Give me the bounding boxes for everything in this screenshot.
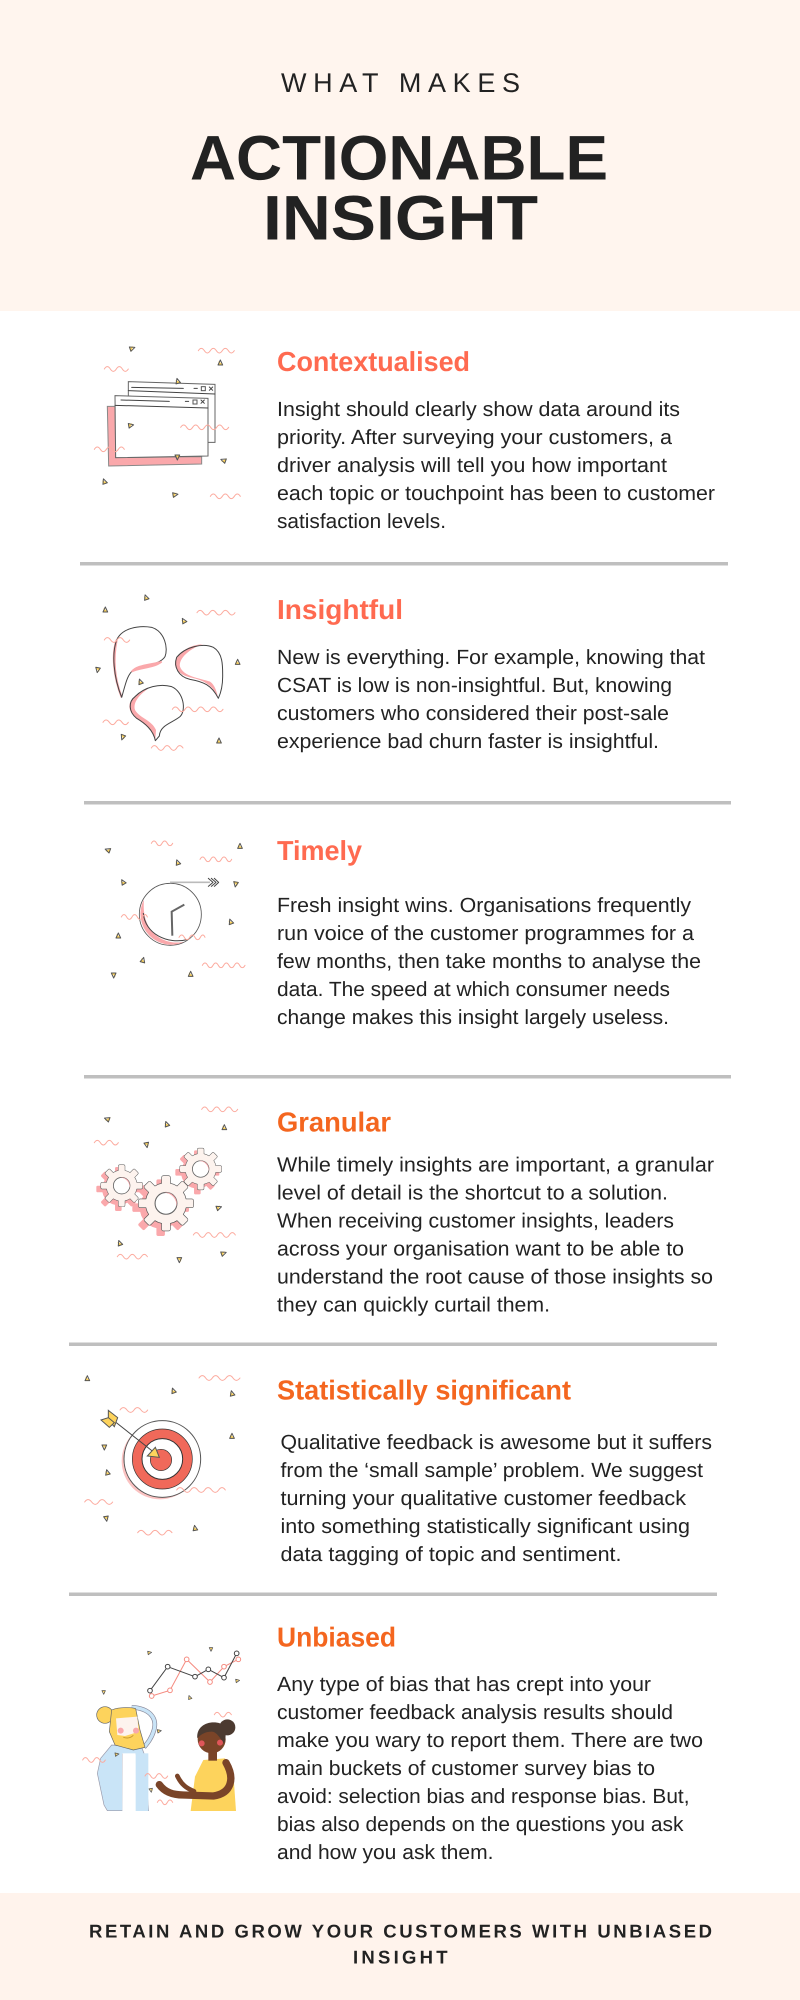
text block: timely bbox=[277, 894, 701, 1029]
text block: timely: run voice of the customer programmes for a bbox=[277, 922, 695, 945]
text block: unbiased: avoid: selection bias and response bias. But, bbox=[277, 1785, 690, 1808]
text block: granular: they can quickly curtail them. bbox=[277, 1294, 550, 1316]
heading: insightful: Insightful bbox=[277, 594, 403, 625]
text block: unbiased: bias also depends on the questions you ask bbox=[277, 1813, 684, 1836]
title bbox=[190, 124, 608, 254]
text block: unbiased bbox=[277, 1673, 703, 1864]
woman bbox=[159, 1719, 236, 1811]
text block: contextualised bbox=[277, 398, 715, 533]
footer call to action bbox=[89, 1920, 712, 1968]
text block: timely: few months, then take months to analyse the bbox=[277, 950, 701, 973]
panel: timely bbox=[104, 835, 701, 1029]
icon: two people discussing a chart bbox=[83, 1647, 241, 1811]
text block: contextualised: each topic or touchpoint has been to customer bbox=[277, 482, 715, 505]
text block: contextualised: priority. After surveying your customers, a bbox=[277, 426, 673, 449]
text block: insightful: customers who considered their post-sale bbox=[277, 702, 669, 725]
heading: timely: Timely bbox=[277, 835, 363, 866]
heading: granular: Granular bbox=[277, 1106, 391, 1138]
footer panel bbox=[0, 1893, 800, 2000]
text block: timely: data. The speed at which consumer needs bbox=[277, 978, 670, 1001]
panel: contextualised bbox=[94, 345, 715, 533]
icon: browser windows bbox=[94, 345, 240, 499]
text block: granular: understand the root cause of those insights so bbox=[277, 1266, 713, 1288]
text block: statistically significant bbox=[280, 1431, 712, 1566]
text block: statistically significant: from the ‘small sample’ problem. We suggest bbox=[280, 1459, 703, 1482]
text block: statistically significant: into something statistically significant using bbox=[280, 1515, 690, 1538]
line chart bbox=[148, 1651, 241, 1698]
text block: granular: across your organisation want to be able to bbox=[277, 1238, 684, 1260]
text block: statistically significant: turning your qualitative customer feedback bbox=[280, 1487, 687, 1510]
man bbox=[97, 1707, 155, 1811]
text block: insightful: experience bad churn faster is insightful. bbox=[277, 730, 659, 753]
text block: unbiased: make you wary to report them. There are two bbox=[277, 1729, 703, 1752]
text block: unbiased: customer feedback analysis results should bbox=[277, 1701, 673, 1724]
text block: contextualised: satisfaction levels. bbox=[277, 510, 446, 533]
text block: granular: level of detail is the shortcut to a solution. bbox=[277, 1182, 668, 1204]
text block: unbiased: main buckets of customer survey bias to bbox=[277, 1757, 655, 1780]
icon: gears bbox=[94, 1107, 238, 1263]
text block: unbiased: Any type of bias that has crept into your bbox=[277, 1673, 651, 1696]
footer call to action: RETAIN AND GROW YOUR CUSTOMERS WITH UNBIASED bbox=[89, 1920, 712, 1942]
text block: statistically significant: data tagging of topic and sentiment. bbox=[280, 1543, 622, 1566]
text block: contextualised: Insight should clearly show data around its bbox=[277, 398, 680, 421]
text block: granular bbox=[277, 1154, 714, 1316]
subtitle: what makes: WHAT MAKES bbox=[281, 68, 520, 98]
icon: clock with arrow bbox=[104, 841, 245, 978]
header panel bbox=[0, 0, 800, 311]
icon: target with arrow bbox=[85, 1376, 240, 1535]
text block: granular: When receiving customer insights, leaders bbox=[277, 1210, 674, 1232]
text block: insightful: CSAT is low is non-insightful. But, knowing bbox=[277, 674, 672, 697]
heading: statistically significant: Statistically significant bbox=[277, 1374, 571, 1406]
footer call to action: INSIGHT bbox=[353, 1946, 448, 1968]
heading: unbiased: Unbiased bbox=[277, 1622, 396, 1652]
heading: contextualised: Contextualised bbox=[277, 346, 470, 377]
text block: timely: Fresh insight wins. Organisations frequently bbox=[277, 894, 692, 917]
panel: insightful bbox=[94, 594, 705, 753]
title: INSIGHT bbox=[263, 184, 538, 254]
title: ACTIONABLE bbox=[190, 124, 608, 194]
text block: insightful: New is everything. For example, knowing that bbox=[277, 646, 705, 669]
panel: granular bbox=[94, 1106, 714, 1316]
panel: statistically significant bbox=[85, 1374, 712, 1566]
text block: statistically significant: Qualitative feedback is awesome but it suffers bbox=[280, 1431, 712, 1454]
icon: speech bubbles bbox=[94, 594, 241, 750]
text block: insightful bbox=[277, 646, 705, 753]
text block: timely: change makes this insight largely useless. bbox=[277, 1006, 669, 1029]
text block: granular: While timely insights are important, a granular bbox=[277, 1154, 714, 1176]
panel: unbiased bbox=[83, 1622, 703, 1864]
text block: unbiased: and how you ask them. bbox=[277, 1841, 494, 1864]
text block: contextualised: driver analysis will tell you how important bbox=[277, 454, 667, 477]
